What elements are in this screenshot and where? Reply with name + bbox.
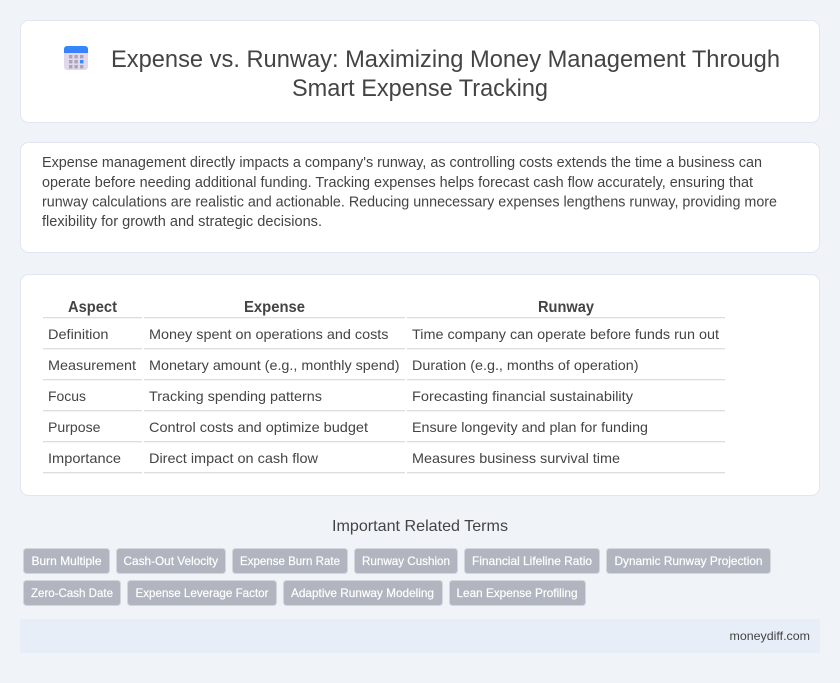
- table header: Aspect: [68, 299, 118, 316]
- chip: [450, 580, 586, 606]
- table row: purpose: Ensure longevity and plan for funding: [412, 419, 648, 435]
- table row: definition: Money spent on operations and costs: [149, 326, 388, 342]
- table row: definition: Time company can operate before funds run out: [412, 326, 719, 342]
- panel: summary paragraph: [20, 142, 820, 252]
- text block: summary: flexibility for growth and strategic decisions.: [42, 214, 322, 230]
- table row: focus: [43, 388, 725, 411]
- text block: summary: [42, 155, 777, 230]
- chip: [232, 548, 348, 574]
- table row: focus: Forecasting financial sustainability: [412, 388, 633, 404]
- table row: purpose: Purpose: [48, 419, 101, 435]
- chip: [606, 548, 770, 574]
- chip: [128, 580, 276, 606]
- chip: Cash-Out Velocity: [124, 554, 218, 568]
- table row: purpose: Control costs and optimize budget: [149, 419, 368, 435]
- panel: comparison table: [20, 274, 820, 496]
- header panel: [20, 20, 820, 122]
- chip: Expense Burn Rate: [240, 554, 340, 568]
- text block: summary: runway calculations are realistic and actionable. Reducing unnecessary expenses lengthens runway, providing more: [42, 194, 777, 210]
- chip: Zero-Cash Date: [31, 586, 113, 600]
- chip: [116, 548, 226, 574]
- chip: Burn Multiple: [32, 554, 102, 568]
- table row: focus: Focus: [48, 388, 86, 404]
- chip: Lean Expense Profiling: [456, 586, 578, 600]
- chip: [24, 548, 110, 574]
- chip: [284, 580, 442, 606]
- chip: [464, 548, 600, 574]
- footer: [20, 619, 820, 653]
- table row: importance: Importance: [48, 450, 121, 466]
- footer: moneydiff.com: [730, 629, 810, 643]
- table row: importance: Direct impact on cash flow: [149, 450, 319, 466]
- table row: definition: [43, 326, 725, 349]
- chip: Runway Cushion: [362, 554, 450, 568]
- table row: measurement: Measurement: [48, 357, 136, 373]
- table row: purpose: [43, 419, 725, 442]
- heading: related terms: Important Related Terms: [332, 518, 508, 535]
- table row: importance: Measures business survival time: [412, 450, 620, 466]
- title: Smart Expense Tracking: [292, 75, 548, 102]
- table row: measurement: Monetary amount (e.g., monthly spend): [149, 357, 400, 373]
- icon: calendar: [64, 46, 88, 70]
- text block: summary: Expense management directly impacts a company's runway, as controlling costs extends the time a business can: [42, 155, 762, 171]
- panel: related term chips: [24, 548, 770, 606]
- table header: [43, 299, 725, 318]
- table row: importance: [43, 450, 725, 473]
- chip: Financial Lifeline Ratio: [472, 554, 592, 568]
- chip: Expense Leverage Factor: [136, 586, 268, 600]
- table row: focus: Tracking spending patterns: [149, 388, 322, 404]
- title: Expense vs. Runway: Maximizing Money Management Through: [111, 46, 780, 73]
- chip: Dynamic Runway Projection: [614, 554, 762, 568]
- title: [111, 46, 780, 102]
- chip: [354, 548, 458, 574]
- text block: summary: operate before needing additional funding. Tracking expenses helps forecast cash flow accurately, ensuring that: [42, 175, 753, 191]
- table row: measurement: [43, 357, 725, 380]
- table header: Expense: [244, 299, 305, 316]
- table header: Runway: [538, 299, 594, 316]
- table row: measurement: Duration (e.g., months of operation): [412, 357, 638, 373]
- chip: Adaptive Runway Modeling: [291, 586, 434, 600]
- table row: definition: Definition: [48, 326, 108, 342]
- chip: [24, 580, 120, 606]
